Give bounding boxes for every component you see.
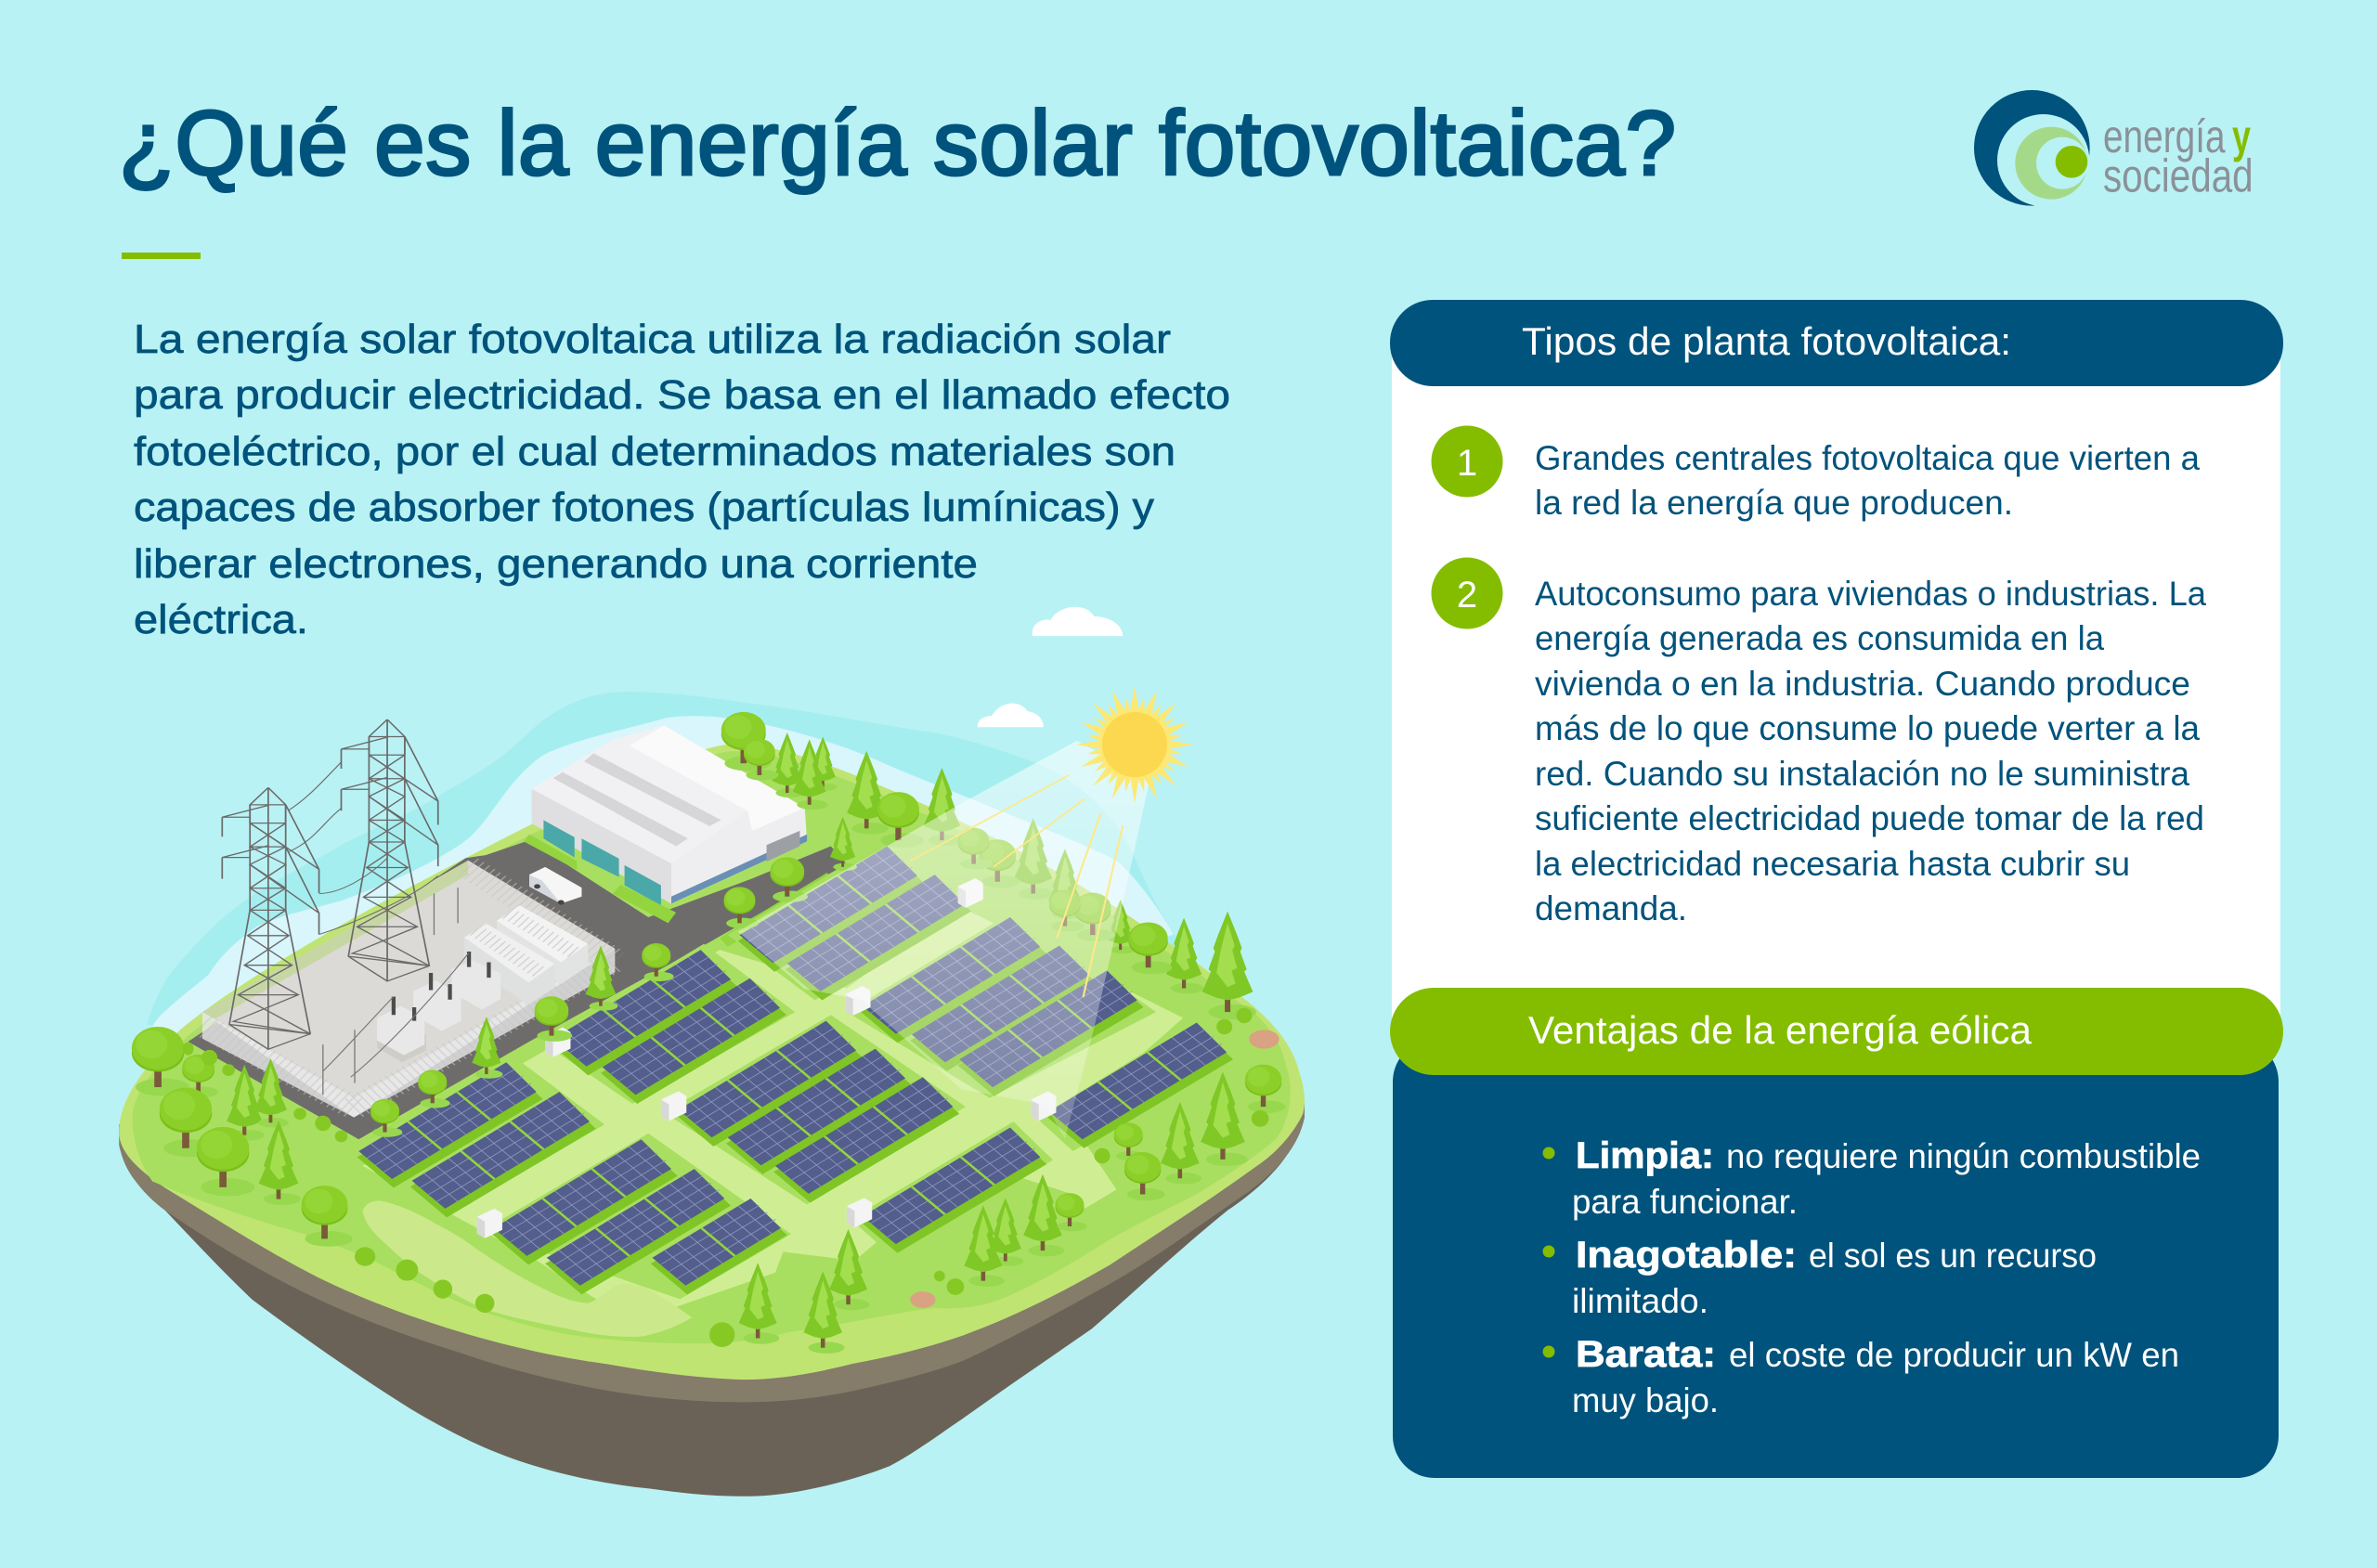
logo: energía y sociedad [1974, 90, 2254, 206]
panel: tipos de planta fotovoltaica [1390, 300, 2283, 1030]
sun [1076, 686, 1193, 803]
inverter boxes [477, 878, 1056, 1238]
logo: energía y sociedad: sociedad [2103, 150, 2254, 202]
item 2: vivienda o en la industria. Cuando produce [1535, 665, 2190, 703]
item 2: energía generada es consumida en la [1535, 619, 2104, 657]
item 1: Grandes centrales fotovoltaica que vierten a [1535, 439, 2200, 477]
item 1: 1 [1457, 443, 1477, 484]
bullet: barata: muy bajo. [1572, 1381, 1719, 1419]
bullet: limpia: Limpia: [1576, 1135, 1714, 1176]
transmission towers [222, 719, 438, 1049]
bullet: limpia: no requiere ningún combustible [1726, 1137, 2201, 1175]
item 2: 2 [1457, 575, 1477, 616]
intro paragraph: para producir electricidad. Se basa en el llamado efecto [134, 372, 1230, 418]
battery containers [464, 905, 588, 1004]
item 1 [1432, 425, 2200, 522]
intro paragraph: liberar electrones, generando una corriente [134, 541, 978, 587]
item 2: demanda. [1535, 889, 1687, 927]
item 2: Autoconsumo para viviendas o industrias. La [1535, 575, 2206, 613]
office building [524, 725, 807, 923]
round trees [132, 712, 1285, 1247]
heading: ventajas: Ventajas de la energía eólica [1528, 1008, 2033, 1052]
intro paragraph: eléctrica. [134, 597, 308, 642]
item 1: la red la energía que producen. [1535, 484, 2013, 522]
item 2: la electricidad necesaria hasta cubrir su [1535, 845, 2130, 883]
bullet: barata: el coste de producir un kW en [1729, 1336, 2179, 1374]
bullet: inagotable: Inagotable: [1576, 1235, 1797, 1276]
bullet: barata [1543, 1334, 2179, 1419]
pine trees [227, 732, 1256, 1354]
island top [119, 744, 1305, 1380]
bullet: inagotable: el sol es un recurso [1809, 1237, 2097, 1275]
intro paragraph [134, 317, 1230, 642]
item 2: red. Cuando su instalación no le suministra [1535, 755, 2189, 793]
bullet: inagotable: ilimitado. [1572, 1282, 1708, 1320]
bullet: limpia: para funcionar. [1572, 1183, 1798, 1221]
logo: energía y sociedad: y [2232, 110, 2251, 162]
clouds [978, 607, 1123, 727]
bushes and rocks [183, 1008, 1279, 1347]
illustration: solar plant on floating island [119, 607, 1305, 1497]
intro paragraph: fotoeléctrico, por el cual determinados materiales son [134, 429, 1176, 474]
heading: tipos de planta [1390, 300, 2283, 386]
panel: ventajas [1390, 988, 2283, 1478]
transformers [323, 888, 500, 1095]
hedges [367, 873, 838, 1146]
intro paragraph: capaces de absorber fotones (partículas lumínicas) y [134, 485, 1154, 530]
bullet: limpia [1543, 1135, 2201, 1221]
title accent bar [122, 253, 201, 259]
item 2: suficiente electricidad puede tomar de la red [1535, 799, 2204, 837]
bullet: inagotable [1543, 1235, 2097, 1320]
heading: ventajas [1390, 988, 2283, 1075]
title: ¿Qué es la energía solar fotovoltaica? [119, 92, 1676, 194]
item 2: más de lo que consume lo puede verter a la [1535, 709, 2200, 747]
light paths between panels [363, 905, 1183, 1337]
van [529, 867, 581, 905]
asphalt and substation [188, 840, 847, 1139]
logo: energía y sociedad: energía [2103, 110, 2226, 162]
sky haze [147, 692, 1184, 1136]
heading: tipos de planta: Tipos de planta fotovoltaica: [1522, 319, 2011, 363]
solar panels [357, 846, 1233, 1294]
item 2 [1432, 557, 2206, 927]
island underside [119, 1101, 1305, 1497]
ground patches [346, 840, 1240, 1302]
intro paragraph: La energía solar fotovoltaica utiliza la radiación solar [134, 317, 1171, 362]
bullet: barata: Barata: [1576, 1334, 1716, 1375]
sunlight beam [738, 741, 1150, 1139]
